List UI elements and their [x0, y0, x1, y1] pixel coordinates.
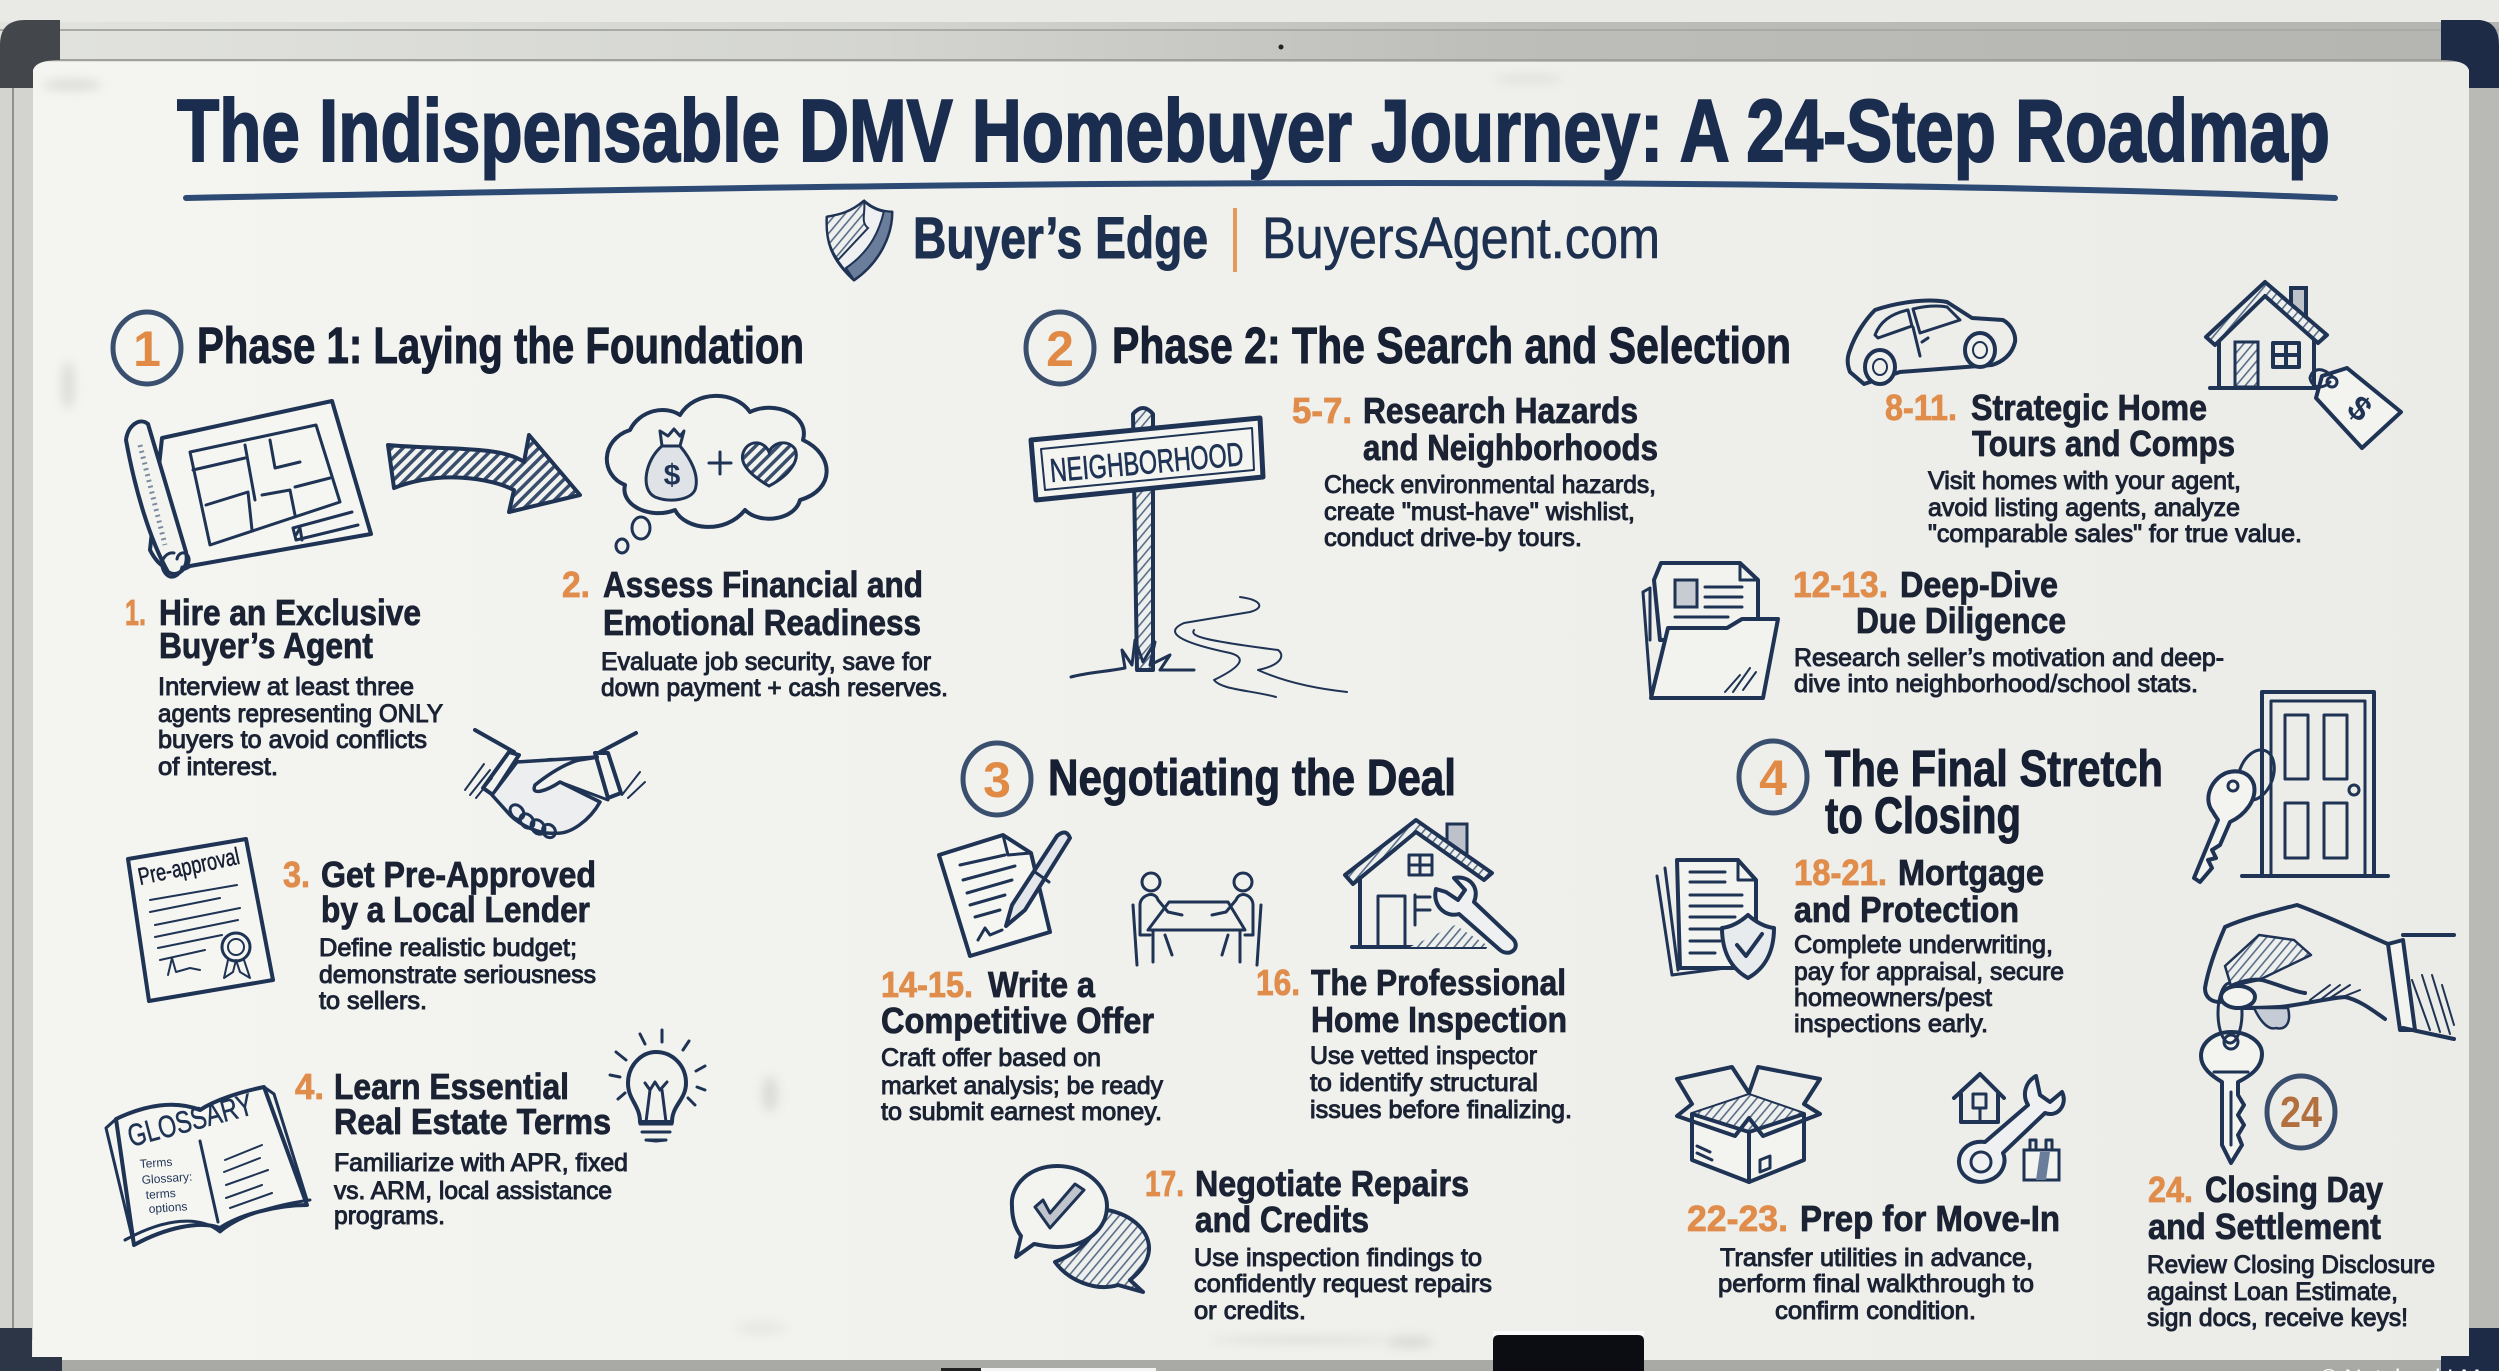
- icon: neighborhood sign: [1031, 408, 1347, 697]
- step 22-23: confirm condition.: [1775, 1297, 1976, 1325]
- step 5-7: 5-7.: [1292, 390, 1352, 431]
- phase 2 heading: [1026, 312, 1791, 384]
- step 5-7: and Neighborhoods: [1363, 427, 1658, 468]
- icon: lightbulb: [610, 1030, 705, 1141]
- title underline: [186, 183, 2335, 198]
- phase 4 heading: [1739, 740, 2163, 844]
- step 17: and Credits: [1195, 1199, 1369, 1240]
- step 2: Emotional Readiness: [603, 602, 921, 643]
- step 18-21: homeowners/pest: [1794, 984, 1992, 1012]
- step 24: Review Closing Disclosure: [2147, 1251, 2435, 1279]
- step 1: [125, 592, 443, 781]
- step 18-21: 18-21.: [1794, 852, 1887, 893]
- step 1: Hire an Exclusive: [159, 592, 421, 633]
- eraser: [1493, 1331, 1644, 1371]
- icon: door with key: [2194, 692, 2388, 882]
- step 1: 1.: [125, 592, 146, 633]
- step 12-13: Due Diligence: [1856, 600, 2066, 641]
- step 4: [295, 1066, 628, 1230]
- step 16: to identify structural: [1310, 1069, 1538, 1097]
- icon: glossary book: options: [148, 1199, 188, 1216]
- key: [2201, 983, 2262, 1163]
- whiteboard smudges: [42, 76, 1564, 1348]
- step 1: agents representing ONLY: [158, 700, 443, 728]
- step 4: Real Estate Terms: [334, 1101, 611, 1142]
- step 18-21: inspections early.: [1794, 1010, 1988, 1038]
- step 16: Use vetted inspector: [1310, 1042, 1537, 1070]
- step 12-13: 12-13.: [1793, 564, 1888, 605]
- panel: phase 4: [1657, 692, 2454, 1332]
- step 5-7: create "must-have" wishlist,: [1324, 498, 1635, 526]
- brand line: [827, 201, 1660, 280]
- step 24: sign docs, receive keys!: [2147, 1304, 2408, 1332]
- step 17: confidently request repairs: [1194, 1270, 1492, 1298]
- step 12-13: dive into neighborhood/school stats.: [1794, 670, 2198, 698]
- step 18-21: and Protection: [1794, 889, 2019, 930]
- step 3: demonstrate seriousness: [319, 961, 596, 989]
- icon: car: [1848, 301, 2015, 384]
- step 24 badge: [2267, 1076, 2335, 1148]
- step 12-13: [1793, 564, 2224, 698]
- step 3: Define realistic budget;: [319, 934, 577, 962]
- phase 4 heading: 4: [1759, 750, 1787, 806]
- step 14-15: market analysis; be ready: [881, 1072, 1163, 1100]
- step 5-7: [1292, 390, 1658, 552]
- step 16: Home Inspection: [1311, 999, 1567, 1040]
- step 2: [562, 564, 948, 702]
- step 22-23: [1687, 1198, 2060, 1325]
- step 8-11: avoid listing agents, analyze: [1928, 494, 2240, 522]
- icon: thought cloud: [607, 396, 827, 553]
- step 14-15: Write a: [988, 964, 1096, 1005]
- icon: house with price tag: $: [2340, 388, 2379, 429]
- step 24: and Settlement: [2148, 1206, 2381, 1247]
- step 18-21: Mortgage: [1898, 852, 2044, 893]
- phase 3 heading: [963, 743, 1456, 815]
- phase 4 heading: to Closing: [1825, 787, 2021, 844]
- step 22-23: Prep for Move-In: [1800, 1198, 2060, 1239]
- phase 3 heading: 3: [983, 752, 1011, 808]
- step 18-21: Complete underwriting,: [1794, 931, 2053, 959]
- step 24: against Loan Estimate,: [2147, 1278, 2398, 1306]
- phase 4 heading: The Final Stretch: [1825, 740, 2163, 797]
- arrow: step 1 to step 2: [388, 435, 580, 512]
- step 17: Use inspection findings to: [1194, 1244, 1482, 1272]
- icon: thought cloud: $: [664, 459, 681, 492]
- step 4: Learn Essential: [334, 1066, 569, 1107]
- step 14-15: [881, 964, 1163, 1126]
- step 17: Negotiate Repairs: [1195, 1163, 1469, 1204]
- step 8-11: 8-11.: [1885, 387, 1957, 428]
- icon: folder with documents: [1643, 563, 1778, 698]
- step 24: 24.: [2148, 1169, 2193, 1210]
- step 2: down payment + cash reserves.: [601, 674, 948, 702]
- step 5-7: Check environmental hazards,: [1324, 471, 1656, 499]
- step 3: 3.: [283, 854, 310, 895]
- step 4: 4.: [295, 1066, 324, 1107]
- icon: blueprint: [126, 401, 371, 577]
- step 24 badge: 24: [2280, 1088, 2322, 1137]
- icon: shield logo: [827, 201, 892, 280]
- step 14-15: to submit earnest money.: [881, 1098, 1162, 1126]
- icon: glossary book: Terms: [139, 1155, 173, 1171]
- icon: mortgage document with shield: [1657, 860, 1774, 978]
- step 16: issues before finalizing.: [1310, 1096, 1572, 1124]
- icon: glossary book: terms: [145, 1186, 176, 1202]
- step 8-11: Tours and Comps: [1972, 423, 2235, 464]
- hand: [2205, 905, 2388, 1028]
- icon: pre-approval document: Pre-approval: [136, 843, 242, 891]
- step 3: [283, 854, 596, 1015]
- step 1: of interest.: [158, 753, 278, 781]
- divider: [1233, 208, 1237, 272]
- icon: hand holding key: [2201, 905, 2454, 1163]
- phase 2 heading: 2: [1046, 321, 1074, 377]
- step 16: The Professional: [1311, 962, 1566, 1003]
- panel: phase 1: [106, 312, 948, 1245]
- step 14-15: Craft offer based on: [881, 1044, 1101, 1072]
- step 8-11: [1885, 387, 2302, 548]
- step 16: [1256, 962, 1572, 1124]
- step 1: Buyer’s Agent: [159, 625, 373, 666]
- icon: moving box: [1677, 1067, 1820, 1182]
- step 1: buyers to avoid conflicts: [158, 726, 427, 754]
- step 12-13: Deep-Dive: [1900, 564, 2058, 605]
- icon: speech bubbles: [1012, 1166, 1149, 1292]
- step 3: to sellers.: [319, 987, 427, 1015]
- icon: neighborhood sign: NEIGHBORHOOD: [1048, 435, 1245, 489]
- icon: pre-approval document: [128, 839, 273, 1001]
- step 2: Evaluate job security, save for: [601, 648, 931, 676]
- step 17: [1145, 1163, 1492, 1325]
- step 14-15: Competitive Offer: [881, 1000, 1154, 1041]
- step 8-11: Visit homes with your agent,: [1928, 467, 2241, 495]
- icon: document and pen: [939, 832, 1070, 956]
- step 18-21: pay for appraisal, secure: [1794, 958, 2064, 986]
- icon: house with wrench: [1345, 820, 1516, 953]
- step 8-11: Strategic Home: [1971, 387, 2207, 428]
- phase 1 heading: 1: [133, 321, 161, 377]
- phase 1 heading: [113, 312, 804, 384]
- icon: glossary book: Glossary:: [141, 1169, 193, 1187]
- step 1: Interview at least three: [158, 673, 414, 701]
- step 14-15: 14-15.: [881, 964, 973, 1005]
- step 5-7: conduct drive-by tours.: [1324, 524, 1582, 552]
- step 18-21: [1794, 852, 2064, 1038]
- step 2: Assess Financial and: [603, 564, 923, 605]
- step 24: [2147, 1169, 2435, 1332]
- step 3: Get Pre-Approved: [321, 854, 596, 895]
- step 24: Closing Day: [2205, 1169, 2383, 1210]
- icon: meeting at table: [1133, 873, 1261, 965]
- step 17: 17.: [1145, 1163, 1184, 1204]
- step 22-23: perform final walkthrough to: [1718, 1270, 2034, 1298]
- step 2: 2.: [562, 564, 590, 605]
- website: BuyersAgent.com: [1262, 206, 1660, 271]
- step 12-13: Research seller’s motivation and deep-: [1794, 644, 2224, 672]
- step 22-23: Transfer utilities in advance,: [1720, 1244, 2033, 1272]
- brand name: Buyer’s Edge: [913, 206, 1208, 271]
- step 8-11: "comparable sales" for true value.: [1928, 520, 2302, 548]
- phase 3 heading: Negotiating the Deal: [1048, 749, 1456, 806]
- icon: house, wrench and bag: [1954, 1074, 2064, 1182]
- icon: glossary book: GLOSSARY: [124, 1087, 256, 1154]
- step 5-7: Research Hazards: [1363, 390, 1638, 431]
- step 3: by a Local Lender: [321, 889, 590, 930]
- step 22-23: 22-23.: [1687, 1198, 1788, 1239]
- step 4: vs. ARM, local assistance: [334, 1177, 612, 1205]
- panel: phase 2: [1026, 282, 2401, 698]
- step 4: programs.: [334, 1202, 445, 1230]
- panel: phase 3: [881, 743, 1572, 1325]
- icon: handshake: [465, 730, 645, 840]
- phase 1 heading: Phase 1: Laying the Foundation: [197, 317, 804, 374]
- step 4: Familiarize with APR, fixed: [334, 1149, 628, 1177]
- icon: house with price tag: [2206, 282, 2401, 448]
- sleeve: [2388, 935, 2454, 1039]
- icon: glossary book: [106, 1087, 310, 1245]
- step 17: or credits.: [1194, 1297, 1306, 1325]
- phase 2 heading: Phase 2: The Search and Selection: [1112, 317, 1791, 374]
- step 16: 16.: [1256, 962, 1300, 1003]
